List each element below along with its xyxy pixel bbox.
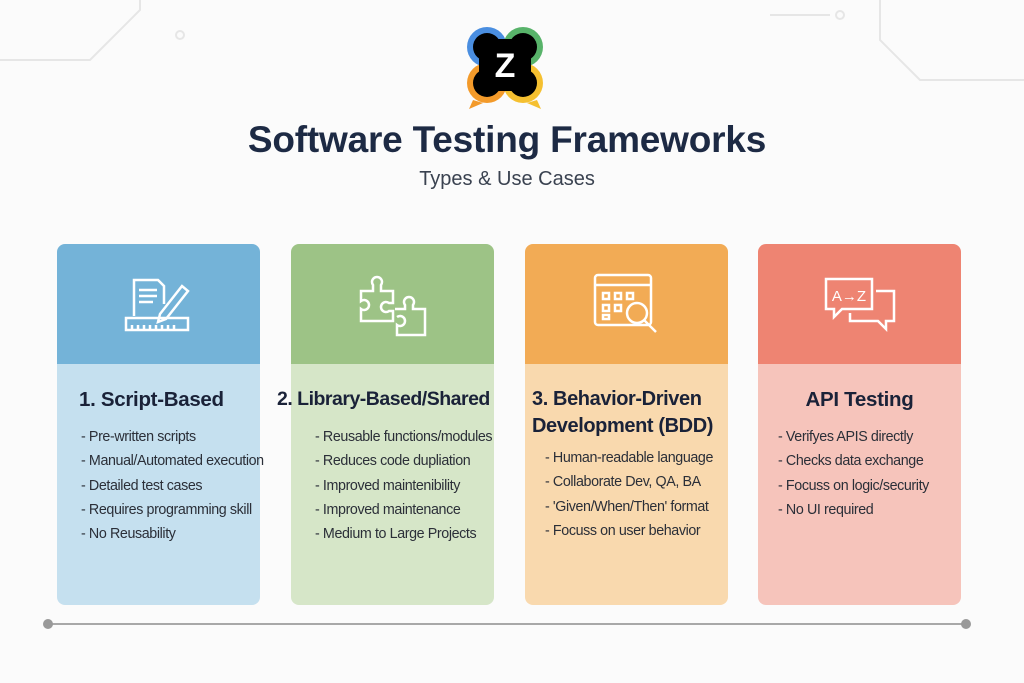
panel: API testing [758, 244, 961, 605]
panel: BDD: - Focuss on user behavior [545, 523, 700, 539]
panel: library-based: - Reusable functions/modules [315, 429, 492, 445]
panel: BDD: Development (BDD) [532, 415, 713, 437]
panel: script-based: - Pre-written scripts [81, 429, 196, 445]
icon: calendar magnifier [525, 244, 728, 364]
logo: Z [495, 47, 515, 85]
panel: API testing: - No UI required [778, 502, 873, 518]
panel: script-based: - Manual/Automated execution [81, 453, 264, 469]
title: Software Testing Frameworks [248, 119, 766, 160]
subtitle: Types & Use Cases [419, 168, 595, 190]
panel: script-based: - No Reusability [81, 526, 176, 542]
panel: library-based: - Improved maintenance [315, 502, 460, 518]
panel: API testing: - Verifyes APIS directly [778, 429, 913, 445]
icon: puzzle [291, 244, 494, 364]
panel: script-based: - Requires programming skill [81, 502, 252, 518]
panel: BDD: - 'Given/When/Then' format [545, 499, 709, 515]
panel: API testing: - Focuss on logic/security [778, 478, 929, 494]
panel: script-based: - Detailed test cases [81, 478, 202, 494]
panel: BDD: 3. Behavior-Driven [532, 388, 702, 410]
panel: library-based: - Reduces code dupliation [315, 453, 470, 469]
panel: library-based: 2. Library-Based/Shared [277, 388, 490, 410]
panel: BDD: - Collaborate Dev, QA, BA [545, 474, 701, 490]
panel: API testing: - Checks data exchange [778, 453, 923, 469]
icon: speech bubbles [758, 244, 961, 364]
timeline line [43, 619, 971, 629]
panel: BDD [525, 244, 728, 605]
logo [467, 27, 543, 109]
panel: API testing: API Testing [806, 388, 913, 411]
panel: library-based: - Medium to Large Projects [315, 526, 476, 542]
icon: document pencil [57, 244, 260, 364]
icon: speech bubbles: A→Z [831, 288, 866, 305]
panel: library-based [277, 244, 494, 605]
panel: library-based: - Improved maintenibility [315, 478, 460, 494]
panel: script-based [57, 244, 264, 605]
panel: BDD: - Human-readable language [545, 450, 713, 466]
panel: script-based: 1. Script-Based [79, 388, 224, 411]
